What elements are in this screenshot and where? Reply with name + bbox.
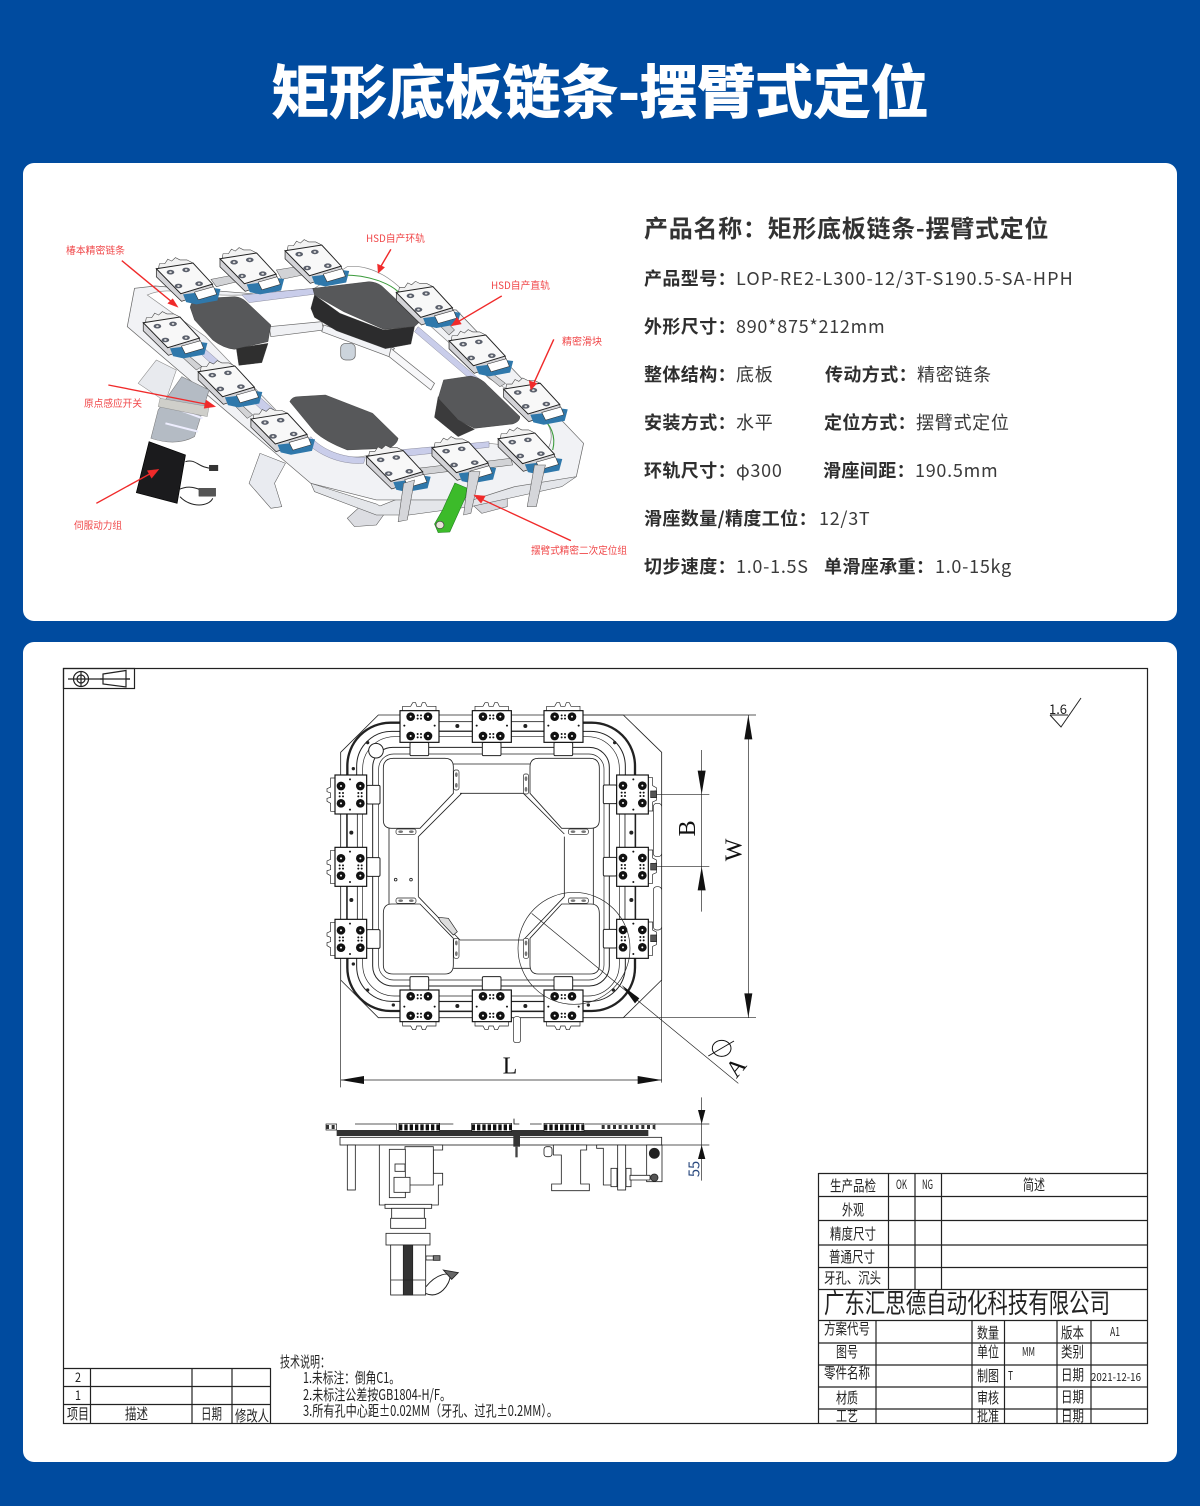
dimension arrows <box>341 715 752 1084</box>
spec: speed and load: 1.0-15kg <box>935 553 1012 579</box>
plate outline <box>341 715 662 1018</box>
spec: ring size and pitch: 滑座间距： <box>823 457 915 483</box>
product name heading: 产品名称：矩形底板链条-摆臂式定位 <box>644 209 1049 244</box>
dimension lines <box>341 715 756 1087</box>
title block text <box>824 1318 1141 1426</box>
title block text: 2021-12-16 <box>1091 1369 1141 1385</box>
spec: slider count: 滑座数量/精度工位： <box>644 505 817 531</box>
surface roughness symbol: 1.6 <box>1049 699 1067 718</box>
inspection rows text: 生产品检 <box>830 1175 876 1196</box>
callout labels: 摆臂式精密二次定位组 <box>531 542 627 557</box>
callout labels <box>66 230 627 557</box>
spec: dimensions: 890*875*212mm <box>736 313 885 339</box>
title block text: 日期 <box>1061 1386 1084 1407</box>
dimension labels: W <box>722 838 748 861</box>
spec: mounting and positioning: 摆臂式定位 <box>916 409 1010 435</box>
callout labels: 伺服动力组 <box>74 517 122 532</box>
top sliders <box>400 703 583 756</box>
inspection rows text: 外观 <box>842 1199 864 1220</box>
cross beams and stem <box>269 322 435 390</box>
title block text: MM <box>1022 1343 1035 1360</box>
inspection and title block table <box>818 1173 1147 1426</box>
inspection rows text: OK <box>896 1174 907 1193</box>
title block text: 图号 <box>836 1341 858 1362</box>
spec: mounting and positioning <box>644 409 1010 435</box>
spec: ring size and pitch: φ300 <box>736 457 783 483</box>
height dimension: 55 <box>683 1161 704 1177</box>
servo motor and gearbox <box>136 360 218 505</box>
dimension labels: L <box>503 1053 517 1079</box>
callout labels: 精密滑块 <box>562 333 602 348</box>
linear rails between sliders <box>178 265 513 475</box>
spec: model: LOP-RE2-L300-12/3T-S190.5-SA-HPH <box>736 265 1074 291</box>
revision table: 修改人 <box>235 1405 269 1426</box>
left sliders <box>327 775 380 958</box>
top plate and slider strip <box>326 1119 662 1157</box>
pad mounting slots <box>396 770 588 958</box>
panel: technical drawing card <box>23 642 1177 1462</box>
technical notes: 技术说明： <box>280 1351 330 1372</box>
base plate <box>127 286 584 527</box>
technical notes <box>280 1351 558 1421</box>
drawing border frame <box>64 668 1148 1424</box>
panel: product overview card <box>23 163 1177 621</box>
revision table: 项目 <box>67 1403 89 1424</box>
title block text: A1 <box>1110 1323 1120 1340</box>
spec: mounting and positioning: 水平 <box>736 409 773 435</box>
spec: structure and drive: 传动方式： <box>825 361 917 387</box>
dimension labels: A <box>721 1052 753 1083</box>
callout labels: HSD自产直轨 <box>491 277 550 292</box>
plan view drawing <box>327 703 756 1087</box>
spec: dimensions: 外形尺寸： <box>644 313 736 339</box>
green swing arm <box>435 483 467 533</box>
spec: structure and drive: 底板 <box>736 361 773 387</box>
inner frame lines <box>389 764 593 968</box>
title block text: T <box>1008 1367 1013 1384</box>
title block text: 日期 <box>1061 1405 1084 1426</box>
spec: ring size and pitch: 190.5mm <box>915 457 998 483</box>
inspection rows text: 普通尺寸 <box>829 1246 875 1267</box>
right side clamps <box>513 791 662 1043</box>
red callout arrows <box>96 249 571 541</box>
revision table: 1 <box>75 1385 81 1404</box>
title: 矩形底板链条-摆臂式定位 <box>271 46 929 130</box>
dark pads <box>190 282 520 450</box>
surface roughness symbol <box>1049 698 1081 727</box>
slider modules <box>143 240 568 492</box>
spec: ring size and pitch <box>644 457 998 483</box>
dimension labels <box>503 820 753 1083</box>
rails <box>347 722 635 1011</box>
technical notes: 2.未标注公差按GB1804-H/F。 <box>303 1384 451 1405</box>
inspection rows text: 牙孔、沉头 <box>824 1267 881 1288</box>
projection symbol <box>64 668 134 688</box>
title block text: 审核 <box>977 1387 999 1408</box>
title block text: 工艺 <box>836 1405 858 1426</box>
title block text: 零件名称 <box>824 1362 870 1383</box>
spec: speed and load <box>644 553 1012 579</box>
cable detail <box>438 917 457 935</box>
positioning arms <box>398 465 545 522</box>
title block text: 材质 <box>836 1387 858 1408</box>
support legs and brackets <box>347 1145 662 1205</box>
technical notes: 3.所有孔中心距±0.02MM（牙孔、过孔±0.2MM）。 <box>303 1400 558 1421</box>
spec: slider count: 12/3T <box>819 505 870 531</box>
3D product illustration with callouts <box>96 240 584 541</box>
dimension labels: B <box>675 820 701 836</box>
technical notes: 1.未标注：倒角C1。 <box>303 1367 400 1388</box>
callout labels: HSD自产环轨 <box>366 230 425 245</box>
spec: structure and drive: 整体结构： <box>644 361 736 387</box>
title block text: 日期 <box>1061 1364 1084 1385</box>
revision table: 2 <box>75 1367 81 1386</box>
front elevation drawing <box>326 1097 709 1295</box>
height dimension <box>640 1097 709 1181</box>
company name: 广东汇思德自动化科技有限公司 <box>824 1282 1110 1321</box>
revision table: 日期 <box>201 1403 222 1424</box>
callout labels: 椿本精密链条 <box>66 242 125 257</box>
ring tracks <box>347 723 635 1011</box>
bottom sliders <box>400 977 583 1030</box>
inspection rows text: NG <box>922 1174 933 1193</box>
title block text: 类别 <box>1061 1341 1084 1362</box>
spec: speed and load: 切步速度： <box>644 553 736 579</box>
inspection rows text: 简述 <box>1023 1174 1045 1195</box>
spec: model: 产品型号： <box>644 265 736 291</box>
title block text: 数量 <box>977 1322 999 1343</box>
title block text: 方案代号 <box>824 1318 870 1339</box>
inspection rows text: 精度尺寸 <box>830 1223 876 1244</box>
revision table <box>63 1367 270 1426</box>
rail bolts <box>349 724 633 1008</box>
spec: structure and drive <box>644 361 992 387</box>
corner pads <box>383 758 599 974</box>
spec: ring size and pitch: 环轨尺寸： <box>644 457 736 483</box>
spec: mounting and positioning: 安装方式： <box>644 409 736 435</box>
spec: structure and drive: 精密链条 <box>917 361 992 387</box>
title block text: 版本 <box>1061 1322 1084 1343</box>
right sliders <box>603 775 656 958</box>
spec: dimensions <box>644 313 885 339</box>
revision table: 描述 <box>125 1403 148 1424</box>
title block text: 制图 <box>977 1365 999 1386</box>
gearbox and motor <box>385 1204 458 1295</box>
callout labels: 原点感应开关 <box>84 395 142 410</box>
inspection rows text <box>824 1174 1045 1288</box>
spec: mounting and positioning: 定位方式： <box>824 409 916 435</box>
title block text: 批准 <box>977 1405 999 1426</box>
spec: speed and load: 单滑座承重： <box>824 553 934 579</box>
spec: speed and load: 1.0-1.5S <box>736 553 809 579</box>
title block text: 单位 <box>977 1341 999 1362</box>
table grid <box>818 1173 1147 1424</box>
rail ring <box>147 266 554 463</box>
